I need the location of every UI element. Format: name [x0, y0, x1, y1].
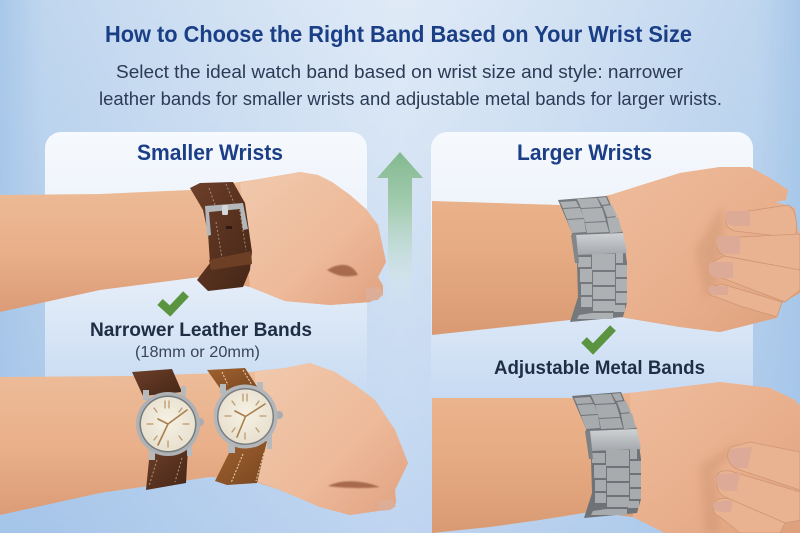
subtitle: Select the ideal watch band based on wrist size and style: narrower	[116, 62, 683, 82]
watch: dark brown strap	[132, 369, 204, 490]
watch: tan strap	[207, 368, 283, 485]
photo: smaller wrist with two watches	[0, 363, 408, 515]
heading: larger wrists: Larger Wrists	[517, 140, 652, 165]
label: strap width: (18mm or 20mm)	[135, 344, 260, 361]
fingers	[714, 442, 800, 533]
arm	[0, 363, 408, 515]
icon: check mark smaller wrists	[160, 294, 186, 311]
fingers	[708, 205, 800, 317]
hand shading	[630, 382, 800, 533]
finger nails	[708, 211, 750, 295]
label: narrower leather bands: Narrower Leather Bands	[90, 320, 312, 341]
label: adjustable metal bands: Adjustable Metal Bands	[494, 358, 705, 379]
metal band	[558, 196, 627, 322]
panel: larger wrists	[431, 132, 753, 400]
title: How to Choose the Right Band Based on Your Wrist Size	[105, 21, 692, 47]
palm shadow	[700, 440, 742, 533]
hand shading	[255, 363, 408, 515]
finger nails	[713, 447, 752, 512]
metal band	[572, 392, 641, 518]
thumb nail	[366, 287, 383, 301]
finger crease	[327, 265, 358, 276]
icon: check mark larger wrists	[584, 328, 613, 349]
arrow: upward green	[377, 152, 423, 305]
hand shading	[240, 172, 386, 305]
photo: larger wrist with metal band	[432, 167, 800, 335]
palm shadow	[695, 205, 724, 300]
arm	[432, 167, 800, 335]
photo: larger wrist with second metal band	[432, 382, 800, 533]
thumb nail	[378, 499, 396, 511]
photo: smaller wrist with leather band	[0, 172, 386, 312]
finger crease	[328, 481, 380, 488]
subtitle	[99, 62, 722, 109]
panel: smaller wrists	[45, 132, 367, 400]
heading: smaller wrists: Smaller Wrists	[137, 140, 283, 165]
arm	[0, 172, 386, 312]
hand shading	[610, 167, 800, 332]
subtitle: leather bands for smaller wrists and adjustable metal bands for larger wrists.	[99, 89, 722, 109]
leather strap	[190, 182, 252, 291]
arm	[432, 382, 800, 533]
